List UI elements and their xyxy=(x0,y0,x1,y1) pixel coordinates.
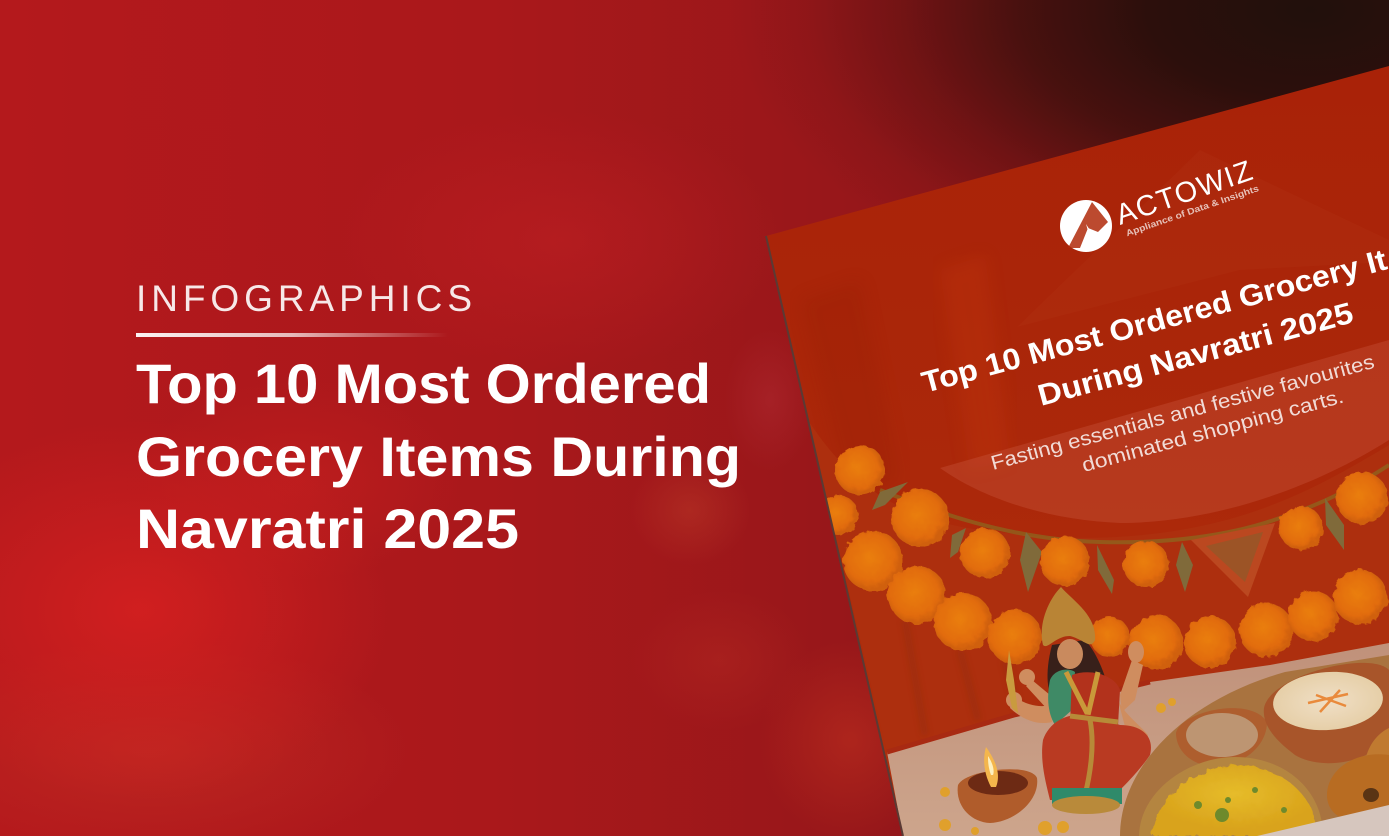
statue blade xyxy=(1006,650,1018,713)
heading underline xyxy=(136,333,448,337)
statue crown xyxy=(1042,587,1095,646)
vertical drape folds xyxy=(904,622,1008,732)
statue hair xyxy=(1048,640,1104,689)
statue red bodice xyxy=(1070,672,1120,725)
logo wordmark: Appliance of Data & Insights xyxy=(1124,183,1260,238)
small bowl: ground sago xyxy=(1176,708,1267,767)
poster curtain folds xyxy=(800,150,1389,500)
khichdi herbs xyxy=(1194,787,1287,822)
poster title: Top 10 Most Ordered Grocery It xyxy=(918,244,1389,400)
statue skirt xyxy=(1042,714,1151,800)
bunting triangle xyxy=(1191,523,1275,597)
large bowl: kheer xyxy=(1264,663,1389,763)
diya flame xyxy=(984,747,998,787)
poster subtitle: dominated shopping carts. xyxy=(1080,386,1346,477)
garland leaves xyxy=(872,482,1344,594)
statue sash and belt xyxy=(1070,716,1118,795)
floor xyxy=(887,643,1389,836)
logo mark xyxy=(1060,200,1112,252)
poster bottom corner: next page fold xyxy=(1257,805,1389,836)
marigold garland xyxy=(818,445,1388,669)
category label: INFOGRAPHICS: INFOGRAPHICS xyxy=(136,278,472,319)
garland backdrop xyxy=(818,434,878,504)
logo wordmark: ACTOWIZ xyxy=(1112,155,1257,232)
poster left edge shadow xyxy=(766,236,903,836)
statue green sari xyxy=(1048,670,1075,725)
statue necklace xyxy=(1066,672,1098,715)
goddess statue xyxy=(1006,587,1151,814)
curtain hem xyxy=(887,682,1150,752)
garland string xyxy=(880,465,1389,542)
marigold petals on floor xyxy=(939,698,1176,835)
main title: Navratri 2025 xyxy=(136,497,519,560)
poster translucent arc behind subtitle xyxy=(940,340,1389,523)
saffron strands xyxy=(1308,690,1348,712)
main title: Top 10 Most Ordered xyxy=(136,352,711,415)
diya lamp xyxy=(958,747,1037,823)
yellow sabudana khichdi bowl xyxy=(1139,757,1323,836)
thali plate xyxy=(1120,655,1389,836)
poster title: During Navratri 2025 xyxy=(1034,297,1357,413)
statue face xyxy=(1057,639,1083,669)
statue arms xyxy=(1006,641,1148,736)
main title xyxy=(136,352,741,560)
poster subtitle: Fasting essentials and festive favourites xyxy=(989,351,1377,475)
vada xyxy=(1327,728,1389,818)
main title: Grocery Items During xyxy=(136,425,741,488)
statue base xyxy=(1052,788,1122,804)
poster: tilted infographic preview xyxy=(766,66,1389,836)
